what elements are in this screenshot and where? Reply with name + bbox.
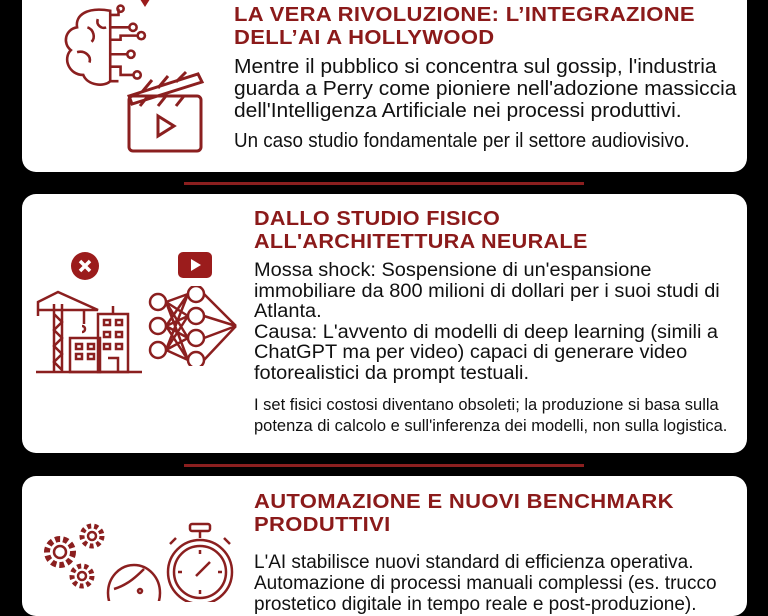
body text: ChatGPT ma per video) capaci di generare video bbox=[254, 342, 687, 363]
heading bbox=[234, 4, 695, 49]
body text: guarda a Perry come pioniere nell'adozione massiccia bbox=[234, 78, 736, 100]
icon: video play bbox=[178, 252, 212, 278]
icon: gears bbox=[44, 524, 104, 588]
note bbox=[254, 395, 727, 435]
body text bbox=[234, 56, 736, 122]
body text: Causa: L'avvento di modelli di deep learning (simili a bbox=[254, 322, 718, 342]
note: potenza di calcolo e sull'inferenza dei modelli, non sulla logistica. bbox=[254, 416, 727, 435]
heading: PRODUTTIVI bbox=[254, 514, 391, 536]
heading: AUTOMAZIONE E NUOVI BENCHMARK bbox=[254, 491, 674, 513]
note: Un caso studio fondamentale per il settore audiovisivo. bbox=[234, 130, 690, 152]
icon: neural network bbox=[148, 286, 237, 366]
body text: Mentre il pubblico si concentra sul gossip, l'industria bbox=[234, 56, 717, 78]
panel: AI revolution bbox=[22, 0, 747, 172]
panel: studio to neural bbox=[22, 194, 747, 453]
body text: prostetico digitale in tempo reale e post-produzione). bbox=[254, 594, 697, 615]
heading: DALLO STUDIO FISICO bbox=[254, 208, 500, 230]
body text: immobiliare da 800 milioni di dollari per i suoi studi di bbox=[254, 280, 720, 302]
body text: Mossa shock: Sospensione di un'espansione bbox=[254, 260, 652, 281]
heading: DELL’AI A HOLLYWOOD bbox=[234, 27, 495, 49]
icon: red marker bbox=[140, 0, 150, 7]
icon: brain circuit bbox=[64, 4, 146, 86]
body text: dell'Intelligenza Artificiale nei processi produttivi. bbox=[234, 100, 682, 122]
body text: Automazione di processi manuali complessi (es. trucco bbox=[254, 573, 717, 594]
heading: ALL'ARCHITETTURA NEURALE bbox=[254, 231, 588, 253]
heading: LA VERA RIVOLUZIONE: L’INTEGRAZIONE bbox=[234, 4, 695, 26]
icon: cancel bbox=[71, 252, 99, 280]
heading bbox=[254, 491, 674, 536]
heading bbox=[254, 208, 588, 253]
body text bbox=[254, 552, 717, 615]
body text bbox=[254, 260, 720, 384]
icon: crane and buildings bbox=[36, 290, 142, 374]
note: I set fisici costosi diventano obsoleti; la produzione si basa sulla bbox=[254, 395, 719, 414]
icon: stopwatch bbox=[166, 522, 234, 602]
panel: automation bbox=[22, 476, 747, 616]
icon: face bbox=[106, 564, 162, 601]
body text: Atlanta. bbox=[254, 301, 322, 322]
body text: L'AI stabilisce nuovi standard di efficienza operativa. bbox=[254, 552, 693, 573]
icon: clapperboard bbox=[127, 71, 204, 152]
body text: fotorealistici da prompt testuali. bbox=[254, 362, 529, 384]
